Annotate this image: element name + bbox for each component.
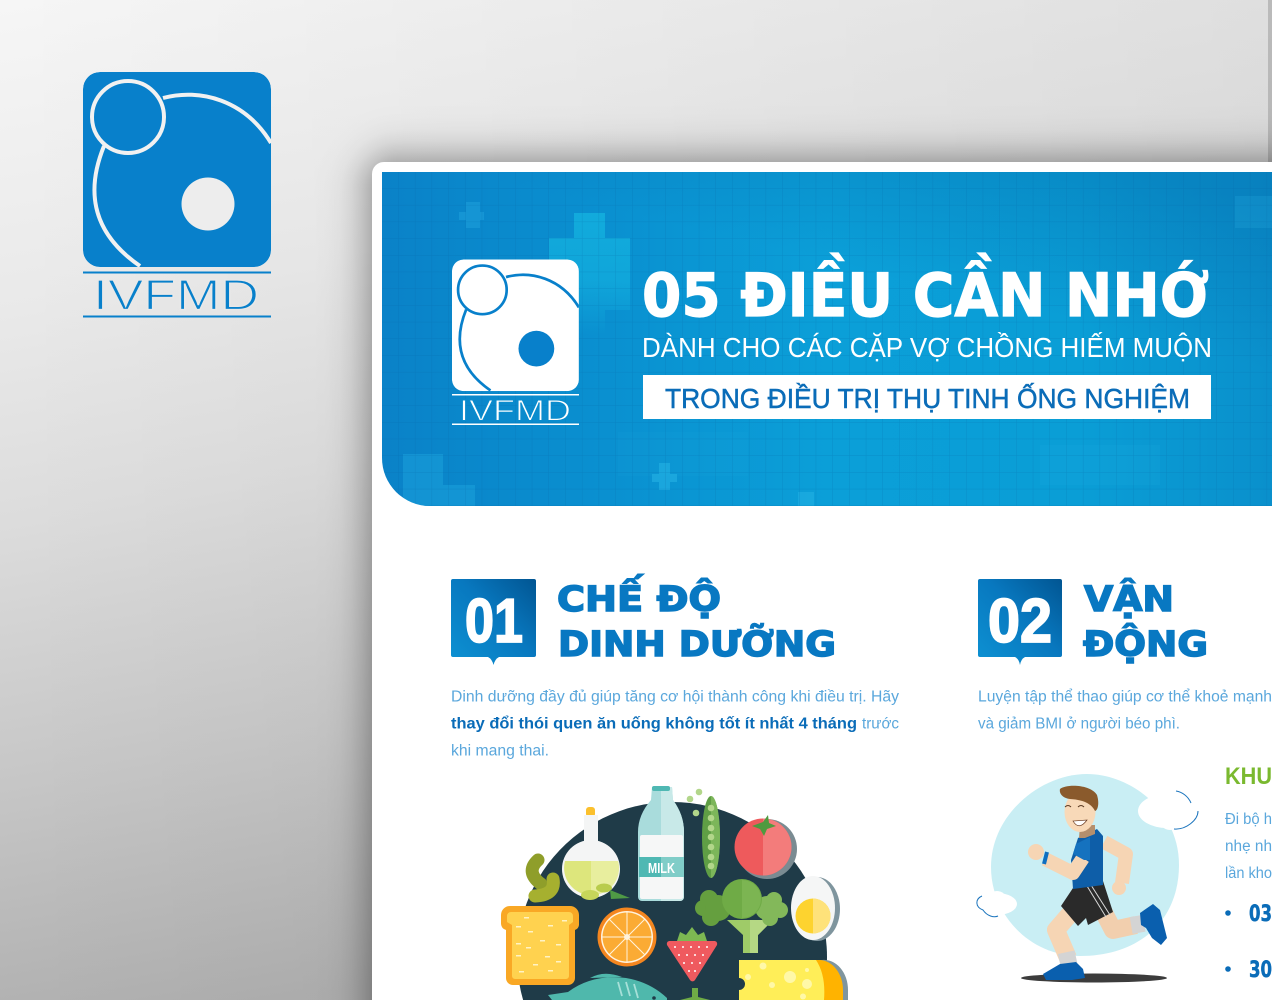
- cloud left: [977, 891, 1017, 917]
- bullet 30: [1225, 958, 1272, 983]
- icon: strawberry: [667, 927, 717, 981]
- section 02: exercise: [977, 577, 1272, 983]
- back arm: [1104, 842, 1126, 883]
- icon: broccoli: [695, 879, 788, 953]
- section 01: nutrition: [451, 573, 899, 1000]
- number badge 02: 02: [988, 587, 1052, 656]
- heading 01: [557, 573, 836, 665]
- banner background: [382, 172, 1272, 506]
- large IVFMD logo: [83, 72, 271, 320]
- dark plate: [517, 802, 827, 1000]
- front shoe: [1043, 962, 1085, 980]
- banner logo mark: [452, 260, 579, 391]
- heading 02: [1083, 577, 1208, 665]
- body text 01: Dinh dưỡng đầy đủ giúp tăng cơ hội thành công khi điều trị. Hãy: [451, 688, 899, 706]
- ground shadow: [1021, 974, 1167, 982]
- icon: fish: [548, 974, 667, 1000]
- back leg: [1100, 905, 1136, 930]
- heading 02: VẬN: [1084, 577, 1174, 620]
- heading 02: ĐỘNG: [1083, 622, 1208, 665]
- light blue backdrop: [991, 774, 1179, 956]
- icon: orange slice: [598, 908, 656, 966]
- number badge 02: [978, 579, 1062, 665]
- icon: milk bottle: MILK: [648, 860, 675, 877]
- icon: cheese: [739, 960, 848, 1000]
- body text 02: Luyện tập thể thao giúp cơ thể khoẻ mạnh: [978, 688, 1272, 706]
- recommendation text: nhẹ nh: [1225, 838, 1272, 855]
- front arm: [1045, 858, 1083, 873]
- banner: [382, 172, 1272, 506]
- cloud right: [1138, 791, 1198, 830]
- icon: vegetable stem: [680, 988, 710, 1000]
- neck and head: [1060, 786, 1098, 838]
- number badge 01: 01: [465, 587, 523, 656]
- banner highlighted line: [643, 375, 1211, 419]
- icon: pea pod: [687, 789, 720, 878]
- body text 01: khi mang thai.: [451, 742, 549, 760]
- back shoe: [1140, 904, 1167, 945]
- food illustration: [501, 786, 848, 1000]
- shorts: [1061, 881, 1113, 926]
- front leg: [1056, 908, 1075, 958]
- shirt: [1071, 829, 1103, 889]
- number badge 01: [451, 579, 536, 665]
- recommendation text: [1225, 811, 1272, 882]
- banner highlighted line: TRONG ĐIỀU TRỊ THỤ TINH ỐNG NGHIỆM: [665, 382, 1190, 414]
- body text 02: [978, 688, 1272, 732]
- card shadow: [312, 102, 1272, 1000]
- logo wordmark: IVFMD: [93, 272, 259, 320]
- banner logo: [452, 260, 579, 428]
- banner title: 05 ĐIỀU CẦN NHỚ: [642, 252, 1209, 331]
- runner illustration: [977, 774, 1198, 982]
- banner logo wordmark: IVFMD: [459, 394, 571, 428]
- banner subtitle: DÀNH CHO CÁC CẶP VỢ CHỒNG HIẾM MUỘN: [642, 332, 1212, 363]
- icon: egg: [791, 876, 840, 941]
- body text 01: trước: [862, 716, 899, 732]
- icon: milk bottle: [638, 786, 684, 901]
- body text 01: [451, 688, 899, 760]
- icon: cashews: [532, 860, 553, 896]
- icon: tomato: [734, 815, 797, 879]
- background right edge strip: [1268, 0, 1272, 162]
- heading 01: CHẾ ĐỘ: [557, 573, 721, 620]
- bullet 03: [1225, 902, 1272, 927]
- body text 01: thay đổi thói quen ăn uống không tốt ít nhất 4 tháng: [451, 716, 857, 732]
- heading 01: DINH DƯỠNG: [558, 623, 836, 665]
- icon: bread: [501, 906, 579, 985]
- logo square mark: [83, 72, 271, 267]
- white document card: [372, 162, 1272, 1000]
- body text 02: và giảm BMI ở người béo phì.: [978, 716, 1180, 732]
- icon: oil flask: [562, 807, 630, 900]
